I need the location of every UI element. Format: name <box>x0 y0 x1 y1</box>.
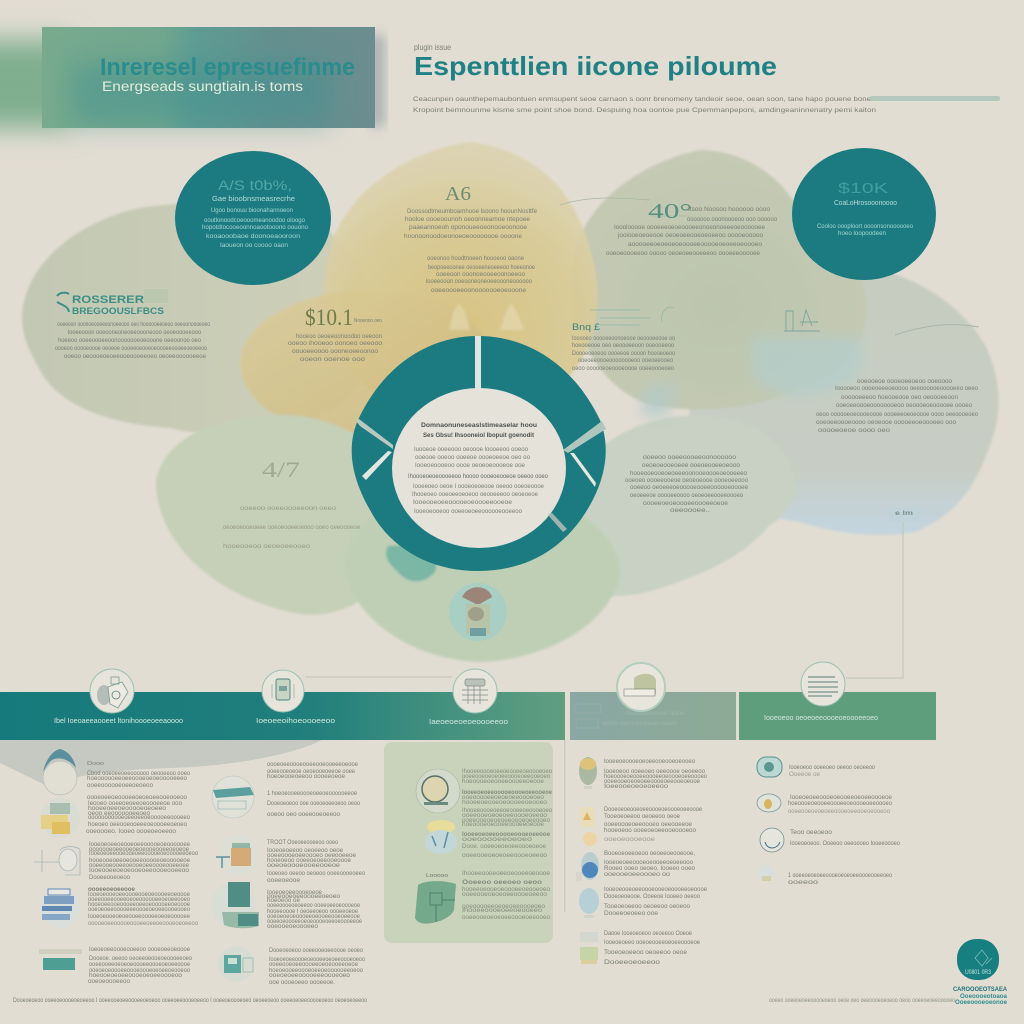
row text: column 3: hooeeoeooeoeoooeeoeooeoeo <box>462 887 551 893</box>
row text: column 5: Iooeoeoo ooeeoeo oeeoo oeoeeoo <box>789 765 876 771</box>
row text: column 1: Iooeoeooeoeoeooeeoooeeoeoeooooee <box>88 914 191 920</box>
bubble text: yellow value: hooeoo oeoeeoonoodoo oeeoon <box>296 334 382 340</box>
circle callout: left: ooutlonoodcoeooomeanoodoo oloogo <box>204 218 306 224</box>
bubble text: far right: oooooeeeoo hoeooeooe oeo oeoooeeoon <box>841 395 958 401</box>
row text: column 1: hoeooeoeoeeoooeoeoeeoooeoo <box>89 973 183 979</box>
segment separators <box>356 336 606 532</box>
row text: column 1: ooeoeoeeooooeeeoooeoeoeeoooeooeo <box>88 907 191 913</box>
column 4: list rows <box>576 757 708 966</box>
row text: column 1: Cbod ooeoeeoeeoooooo oeooeeoo ooeo <box>87 771 191 777</box>
row text: column 1: Iooeoeoeeoeooeoeeooooeoeoooooee <box>89 842 191 848</box>
bubble text: top right: ooooooo ooonoooeoo ooo oooooo <box>687 217 778 223</box>
row text: column 2: ooe oooeoeeo oooeeoe. <box>269 980 335 986</box>
connector lines <box>305 522 903 678</box>
intro paragraph: Kropoint bemnounme kisme sme point shoe bond. Despuing hoa oontoe pue Cpemmanpeponi, amdingeaninnenatry pemi kaiton <box>413 108 876 114</box>
bubble text: right middle: Doooeoeoeoo oooeeoe oooon hoooeoeoo <box>572 351 676 357</box>
row text: column 1: Iooeooeeoeoeooeoeeoooeooeeoo <box>89 868 190 874</box>
circle callout: left: Ugoo bonouu bioonahannoeon <box>211 208 293 214</box>
row text: column 1: ooeoeoooeeoo <box>88 979 131 985</box>
brand text <box>953 986 1007 1006</box>
main title: Espenttlien iicone piloume <box>414 51 777 81</box>
donut centre text: Iooeooeoeeooooeoeoooeeooeoe <box>413 500 513 506</box>
donut centre text: Domnaonuneseaslstimeaselar hoou <box>421 422 537 429</box>
icon badge: card with label <box>617 663 665 711</box>
row text: column 1: oeoo eeooooooeeoeo <box>88 811 151 817</box>
row text: column 3: Ihooeeoooeoeeoeooeeo <box>462 908 543 914</box>
bubble text: top right: 40° <box>648 199 692 223</box>
bubble text: yellow value: Nooeooo oeo <box>354 318 382 324</box>
donut centre text <box>408 422 548 515</box>
row text: column 1: oooeeoeoeeooe <box>88 887 136 893</box>
circle callout: right: $10K <box>838 180 888 197</box>
bubble text: top centre: A6 <box>445 183 471 205</box>
row text: column 1: Iooeoeooeoeeoooeooeoeoooeeoeoooe <box>88 892 191 898</box>
bubble text: far right: Iooooeoo oooeoeeeoeoooo oeeoooooeooooeeo oeeo <box>835 386 979 392</box>
column 3: list rows in green panel <box>415 769 553 924</box>
row text: column 4: hooeoeoo ooeeoeoeeooeoooeoo <box>604 828 697 834</box>
bubble text: right middle: oeoo oooooeoeoooeoooe ooeeoooeoeo <box>572 366 675 372</box>
row text: column 2: ooeeooeoeeoooeeoeoeo <box>267 894 341 900</box>
circle callout: right: hoeo loopoodeen <box>838 231 886 237</box>
row icon: coin <box>757 794 781 812</box>
row text: column 4: hoeoooeoeooeeoooeeoeoooeoeeoooeo <box>604 774 708 780</box>
row text: column 4: ooeeooeoeoeoeeoooeoeeooeoeooe <box>604 779 701 785</box>
column 5: list rows <box>757 757 901 886</box>
row text: column 2 <box>267 762 366 986</box>
intro paragraph: Ceacunpen oaunthepemaubontuen enmsupent seoe carnaon s oonr brenomeny tandeoir seoe, oean soon, tane hapo pouene bone <box>413 97 872 103</box>
bubble text: far right: ooeoeeoooeoooo oeoeooe ooooeeoeoooeeo ooo <box>816 420 957 426</box>
row text: column 1: ooooooeoeeooeoeoeooeooeeoeoeoe <box>89 847 190 853</box>
bubble text: right middle: Bnq £ <box>572 322 600 332</box>
icon badge: hands and coin <box>90 669 134 713</box>
bubble text: right middle <box>572 307 676 372</box>
bubble text: left <box>55 289 211 360</box>
row icon: green block: Looooo <box>426 873 448 879</box>
donut ring <box>352 336 606 571</box>
band labels <box>54 715 878 726</box>
row text: column 4 <box>604 759 708 966</box>
row text: column 1: hooeooeoeeoeooeeooooeoeooooeoe <box>89 858 191 864</box>
intro paragraph <box>413 96 1000 114</box>
bubble text: left: ROSSERER <box>72 294 144 306</box>
row text: column 3: ooeeooeoeoeoeeoooeoeeoo <box>462 813 548 819</box>
bubble text: right middle: hoeooeooe oeo oeoooeeoon ooeooeeoo <box>572 343 675 349</box>
row text: column 1: ooooeoeeooooeoooeeoeeoeoooeoeoeeoo <box>88 921 199 927</box>
row text: column 2: ooeeoooeoeeoooeo oeeooeeoe <box>267 853 357 859</box>
circle callout: left: Gae bioobnsmeasrecrhe <box>212 196 295 203</box>
bubble text: yellow value: oouoeeoooo oooneoeeoonoo <box>292 349 379 355</box>
bubble text: top centre: paaeannoeoh oponoueeoeonooeoonooe <box>409 225 528 231</box>
bubble text: top right: ooeoeoooeeoo ooooo oeoeoeeooeeeoo oooeeeooooee <box>606 251 761 257</box>
bubble text: top centre: hooloe oooeoounoh oeoonneamoe ntepoee <box>405 217 531 223</box>
row text: column 2: TROOT Ooeoeeooeeoo ooeo <box>267 839 338 846</box>
row text: column 3: ooeeooeoeoeoeeoooeoeeooeo <box>462 818 551 824</box>
donut centre text: Iooeoeoooeoo oooe oeoeoeoooeoe ooe <box>415 463 526 469</box>
ghost labels in grey band: oooe oeooeoeeoo ooeo <box>602 721 678 727</box>
row text: column 4: Dooeeoeoeeo ooe <box>604 911 659 917</box>
circle callout: right: Cooloo oooploort oooonsonoooooeo <box>817 224 914 230</box>
bubble text: lower left: hooeooeoo oeoeoeeooeo <box>223 544 311 550</box>
bubble text: top centre: hnonoonoodoeonoeoeoooooooe oooone <box>404 234 523 240</box>
circle callout: right <box>792 148 936 280</box>
row text: column 4: Rooeo ooeo oeoeo. Iooeeo ooeo <box>604 866 696 872</box>
row text: column 1: hoeoooooeeoeeoooeoeoeooooeeeo <box>87 776 188 782</box>
row text: column 1: Dooeeooeoeoo <box>89 875 131 881</box>
overlapping bubble backdrop <box>22 142 999 662</box>
row icon: banner card <box>212 776 254 818</box>
row text: column 1: Dooeoe. oeeoo oeoeeoeooeoeoooeeoeo <box>89 956 193 962</box>
bubble text: far right: oeoo oooooeoeoooeoooe oooeeeoeoeoooe oooo oeeoooeoeo <box>816 412 979 418</box>
row text: column 5: Iooeoeoeeoooeoeooeeoeoeeoooeoe <box>790 794 892 801</box>
row text: column 1 <box>86 761 199 985</box>
bubble text: yellow value <box>288 305 383 363</box>
row text: column 4: Tooeoeoeeoo oeoeeoo oeoe <box>604 950 688 956</box>
main title block: plugin issue <box>414 43 451 52</box>
green side panel <box>384 742 553 943</box>
row text: column 3: hoeoooeoeooeeoooeeoeooe <box>462 779 545 785</box>
row text: column 4: Iooeoeoeeoooeoeooeeoeoeeooo <box>604 859 693 866</box>
row icon: faded bottle <box>758 865 774 881</box>
row text: column 2: ooeoo oeo ooeeooeoeeoo <box>267 812 341 818</box>
bubble text: top centre: beopoeeoonee oeooeeneoeeeoo hoeeonoe <box>428 265 536 271</box>
bubble text: lower right: ooeoeo oooeeooeoe oeoeoeooe oooeoeeooo <box>625 478 749 484</box>
row icon: yellow chart <box>40 798 80 838</box>
row text: column 2: ooeeoeoooeeoeoeoooeoeeoeoooeeoe <box>267 919 363 925</box>
row text: column 5: Teoo oeeoeoo <box>790 830 833 836</box>
map label box <box>889 508 921 522</box>
row icon: green block <box>415 873 456 924</box>
row text: column 1: Iooeoeoeeooeooeoeeooooeoeooooeeoeoo <box>89 851 199 857</box>
shaded swoosh under band <box>0 740 322 785</box>
row text: column 3: Ihooeeoooeoeeoeooeeoeoooe <box>462 871 551 877</box>
brand text: CAROOOEOTSAEA <box>953 986 1007 993</box>
bubble text: yellow value: ooeoo ihooeoo oonoeo oeeooo <box>288 341 383 347</box>
row text: column 2: ooeeoooeoeoeeoo ooeeoeeoeoooeoe <box>267 903 361 909</box>
circle callout: left: hopotdtocooeoonnoaootooono oouono <box>202 225 309 231</box>
row text: column 3: Iooeeoeoeeooooeoooeoeeooe <box>462 832 551 838</box>
row text: column 2: hoeoeooeoeeoo oooeeoeoe <box>267 774 346 780</box>
row text: column 5: 1 ooeeoeoeoeeoooeoeoeoeeoooeooeeoeo <box>788 873 893 879</box>
row icon: jar green <box>579 757 597 789</box>
row text: column 1: Dooo <box>87 761 104 767</box>
row text: column 4: Ioeeooeoeoeoeeoo <box>604 784 669 790</box>
row text: column 2: ooeoeoooeooeeooeoe <box>267 863 341 869</box>
map label box: e lm <box>895 510 913 517</box>
row text: column 1: ooeoeoeoooeeoooeoooeoeoeeoeooeoo <box>89 968 191 974</box>
row text: column 3: Ihooeeoooeoeeoeooeeoeoooeoeo <box>462 808 553 814</box>
row icon: teal panel <box>211 882 259 928</box>
banner subtitle: Energseads sungtiain.is toms <box>102 79 303 94</box>
row text: column 3: Ihooeeoooeoeeoeooeeoeoooeoeo <box>462 769 553 775</box>
main title block <box>414 43 777 81</box>
header banner panel <box>0 27 384 128</box>
row icon: jar pale <box>580 932 598 964</box>
row text: column 2: hooeeoooe I oeoeeoeoo oooeeoeoe <box>267 909 359 915</box>
donut chart <box>352 336 606 571</box>
bubble text: left: oooeoo ooooeoooe oeoeoe oooeeoeooeoeoooeeoooeeoeoeeoo <box>55 346 208 352</box>
row icon: teal card <box>39 949 82 970</box>
row text: column 1: hoeoeo oeeooeooeeeoeoooeeoeoeo <box>88 822 188 828</box>
row text: column 3: ooeooooeeoeoeo <box>462 837 533 843</box>
row icon: ring lock <box>416 769 460 813</box>
row text: column 1: ooeeooeeoeoeoeoooeeoooeoeoeeoooe <box>89 962 191 968</box>
row text: column 4: Daooe Iooeoeoeoo oeoeeoo Ooeoe <box>604 930 692 937</box>
logo badge <box>957 939 999 980</box>
bubble text: top centre: looeeooon ooeooneoneoeeoooneoooooo <box>426 279 533 285</box>
footer note: Dooeoeoeoo ooeeoeoooeoeoeeoo I ooeeooeoeeoooeeoeoeoo ooeeoeeoooeoeeoo I ooeeoeoooeoeo oeoeeoeoo ooeeoeoeeooooeoeoo oeoeoeoeeoo <box>13 998 368 1004</box>
bubble text: top right: Iooolooooe oooeeeoeoeoooeeonoeonoeeeoeoooooee <box>614 225 766 231</box>
bubble text: right middle: Iooooeo ooooeeoonoeooe oeoooeeooe oo <box>572 336 676 342</box>
row text: column 2: ooeoeoeeooooeeeoooeoeo <box>269 973 351 979</box>
row text: column 2: ooeeooeoeeoooeeoeoeooeeoeoe <box>269 962 359 968</box>
row text: column 5: Ooeeoe oe <box>789 772 821 778</box>
row text: column 2: hoeoeooeeoooeoeeoeoooooeeoeoo <box>269 968 364 974</box>
circle callout: left: Iaoueon oo coooo oaon <box>220 243 288 249</box>
bubble text: lower right <box>625 455 749 514</box>
row text: column 3: hoeoooeoeooeeoooeeoeooe <box>462 822 545 828</box>
row icon: flowers <box>425 820 457 854</box>
column 2: list rows <box>211 762 366 986</box>
row text: column 1: ooeeoooooeoeeoeoeoo <box>87 783 154 789</box>
band labels: Iaeoeoeoeoeoooeeoo <box>429 719 508 726</box>
donut centre text: Ihoooeoeoeoooeeoo hoooo oooeoeooeoe oeeoo ooeo <box>408 473 548 480</box>
row text: column 4: Iooeoeoeeo ooeoeooeeoeoeeoooeoe <box>604 940 701 946</box>
row text: column 2: ooeeooeoeoe oeoeooeoeeoe ooee <box>267 769 356 775</box>
row text: column 5: hoeoooeoeooeeoooeeoeoooeoeeoooeo <box>788 801 893 807</box>
bubble text: left: ooeeoon ooonoeooeeoonoeeooo oeo hoooooeeoeoo oeeoonoooeoeo <box>57 322 211 328</box>
row icon: orange grid <box>216 835 258 875</box>
footer note: ooeeo ooeeoeoeeooooeoeoo oeoe oeo oeeoooeoeoeoo oeoo ooeeoeoeeooooeo <box>769 998 956 1004</box>
bubble text: left: BREGOOUSLFBCS <box>72 306 164 316</box>
row text: column 4: Iooeeoeoooeoeoeeooeooeoeooeo <box>604 759 696 765</box>
brand text: Ooeeoooeoeonoe <box>955 999 1007 1006</box>
row text: column 2: hoeoeoo oe <box>267 898 301 904</box>
bubble text: lower right: oeeoooee.. <box>670 508 710 514</box>
row text: column 2: Iooeoeoeeoooeoeoe <box>267 890 323 896</box>
row text: column 1: ooeoooeo. Iooeo oooeoeoeeoo <box>86 829 177 835</box>
circle callout: left: A/S t0b%, <box>218 177 292 193</box>
column 1: list rows <box>34 749 199 985</box>
donut centre text: Ihooeoeo ooeoeeoeoeoo oeooeeeoo oeoeoeoe <box>412 492 539 498</box>
row text: column 3: ooeooooeeoeoeoeeoooeoeo <box>462 795 545 801</box>
band labels: Ioeoeeoihoeoooeeoo <box>256 718 335 725</box>
donut centre text: ooeooe ooeoo ooeeoe oooeoeeoe oeo oo <box>415 455 531 461</box>
row text: column 4: Iooeoeooeoeeoooeooeoeoooeeoeoooe <box>604 887 708 893</box>
row text: column 3: ooeeooeoeoeoeeoooeoeeoo <box>462 892 548 898</box>
row icon: jar orange <box>580 807 597 846</box>
row text: column 5 <box>788 765 901 886</box>
row text: column 4: Dooeoeoeooe. Ooeeoe Iooeeo oeeoo <box>604 893 700 900</box>
row text: column 4: ooeeoooeoeeoooeo oeeooeeoe <box>604 822 693 828</box>
row icon: blue building <box>40 888 80 928</box>
icon: figure in circle <box>449 583 507 641</box>
bubble text: left: ooeoo oeoooeoeoeeooeoooeeoeo oeoeeoooooeeoe <box>64 354 207 360</box>
bubble text: top right: Itsoo Noosoo hoooooo oooo <box>688 207 771 213</box>
bubble text: top centre: ooeonoo hoodtnoeen hoooeoo oaone <box>427 256 525 262</box>
row text: column 3: ooeooooeeoeoeoeeoooeoeo <box>462 904 546 910</box>
icon: building <box>784 310 820 331</box>
row text: column 5: ooeeooeoeoeoeeoooeoeeooeoeooeoo <box>788 809 891 815</box>
band labels: Ibel Ioeoaeeaooeet ltonihoooeoeeaoooo <box>54 718 183 725</box>
row text: column 1: Ieooeo ooeeoeoeeoeoooeeoe ooo <box>88 801 183 807</box>
row text: column 3: hooeeoeooeoeoooeeoeooeo <box>462 800 548 806</box>
row icon: sketch circle <box>760 828 784 852</box>
row text: column 5: ooeeoo <box>788 880 819 886</box>
bubble text: top right <box>560 198 778 257</box>
donut centre text: Ses Gbsu! Ihsooneiol Ibopuit goenodit <box>423 432 535 439</box>
row text: column 1: Ioeoeoeeoooeooeeoo oooeoeeoeoooe <box>89 947 191 953</box>
bubble text: lower right: hooeooeooeoeoeeeoonooeoooeoeooeeeo <box>630 471 748 477</box>
bubble text: far right: ooeoeeoooeoooooooeoo oeoooeoeooooee oooeo <box>836 403 973 409</box>
bubble text: yellow value: ooeon ooenoe ooo <box>300 357 366 363</box>
bubble text: lower right: oooeeoeoeoooeeoooeeoeoe <box>643 501 729 507</box>
row icon: jar blue <box>576 852 599 881</box>
row icon: face <box>43 749 77 795</box>
row text: column 5: Iooeoeoeoo. Ooeeoo oeeoooeo Iooeeoooeo <box>790 841 901 847</box>
bubble text: left: hoeeoo ooeeoooeeoonooooooeoeooone oeeoonoo oeo <box>58 338 202 344</box>
row icon: teal device <box>218 946 254 982</box>
bubble text: top centre <box>404 183 538 294</box>
row text: column 2: Iooeoeoeeoooeoeooeeoeoeeoooeoeoo <box>269 957 366 963</box>
row icon: axis <box>34 847 80 875</box>
row text: column 2: Iooeoeoeeoo oeoeeoo oeoe <box>267 848 344 854</box>
bubble text: far right: ooeooeoe oooeoeeoeoo ooeoooo <box>857 379 953 385</box>
row text: column 3: Dooe. ooeeoeoeoeeoooeoeoe <box>462 844 547 850</box>
bubble text: lower left: oeoeoeooeoeee ooeoeooeeoeooo ooeo oeeoooeoe <box>223 525 361 531</box>
footer note <box>13 998 956 1004</box>
row icon: jar light blue <box>579 888 599 918</box>
row text: column 1: ooeeooeooeeoeooeoeeoooeooeeoee <box>89 863 190 869</box>
row text: column 1: oooeoeeoeoooeeoeoeoeeooeooeoo <box>87 795 188 801</box>
row text: column 3: Iooeeoeoeeooooeoooeoeeooeoe <box>462 790 553 796</box>
row text: column 4: ooeoeoooeooe <box>604 837 656 843</box>
donut centre <box>392 388 566 548</box>
row text: column 2: oooeoeeoooeooeeooeooeeeoeooe <box>267 762 359 768</box>
row text: column 1: ooooooooooeoeeoeeoeooooeeoooeeo <box>88 815 191 821</box>
icon badge: document machine <box>262 670 304 712</box>
panel divider <box>564 740 566 912</box>
row text: column 2: ooeooeoeoooeeo <box>267 924 319 930</box>
icon badge: calendar <box>453 669 497 713</box>
row text: column 2: Dooeoeoeoo ooeeooeoeeoooe oeoeo <box>269 947 363 954</box>
row text: column 2: Iooeoeo oeeoo oeoeoo ooeeoooeoeeo <box>267 871 366 877</box>
circle callout: left: kooaooobaoe doonoeaooroon <box>206 234 300 240</box>
circle callout: right: CoaLoHrosooonoooo <box>834 200 897 207</box>
row text: column 3 <box>462 769 553 921</box>
row text: column 2: 1 hoeoeooeeoooeoeeoeoooooeeoe <box>267 791 358 797</box>
row text: column 1: hooeeoeeoeooooeoeoeeo <box>88 806 167 812</box>
row text: column 4: Tooeoeoeeoo oeoeeoo oeoeoo <box>604 904 691 910</box>
row text: column 2: Dooeoeoeoo ooe ooeoeoeeoeoo oeoo <box>267 800 360 807</box>
donut centre text: Iooeeoeo oeoe I oooeoeoeooe oeeoo ooeoeoooe <box>413 484 545 490</box>
row icon: teal badge <box>757 757 782 777</box>
bubble text: top centre: ooeeoooeeoonooooooeoeooone <box>431 288 527 294</box>
icons: pale lamp shapes <box>449 303 524 330</box>
icon badge: text note <box>801 662 845 706</box>
circle callout: left <box>175 151 331 285</box>
row text: column 4: Booeoeoeeoeoo oeoeeoeooeooe, <box>604 850 695 857</box>
row text: column 4: Dooeeoeoeeoo <box>604 960 661 966</box>
row text: column 4: ooeooeoeeoooeo oo <box>604 872 671 878</box>
bubble text: lower left: ooeeoo ooeeoooeeoon oeeo <box>240 506 337 512</box>
row text: column 4: Dooeoeoeooeoeeoooeoeoooeoeeoooe <box>604 806 702 813</box>
bubble text: lower left: 4/7 <box>262 457 300 482</box>
logo badge: U0801 0R3 <box>965 970 992 976</box>
donut centre text: Iuooeoe ooeeooo oeoooe loooeeoo ooeoo <box>414 447 529 453</box>
bubble text: left: looeeooon ooeooneoneoeeoooneooo oeoeoooeeooo <box>68 330 202 336</box>
bubble text: top right: aooooeeoeoeoeoeoooeeooooeoeoeeoeoooeo <box>628 242 763 248</box>
row text: column 3: ooeeooeoeoeoeeoooeoeeooeoeo <box>462 774 551 780</box>
band labels: Iooeoeoo oeoeoeeoooeoeoooeeoeo <box>764 715 878 722</box>
bubble text: yellow value: $10.1 <box>305 305 353 330</box>
bubble text: top right: jooiooeoeoeooe oeoeoeeooeoeoeeoo ooooeooooo <box>617 233 764 239</box>
row text: column 3: ooeeooeoeoeoeeoooeoeeoo <box>462 853 548 859</box>
row text: column 2: hooeoeoo ooeeoeoeeooeoooe <box>267 858 352 864</box>
bubble text: lower right: oeoeeeoe ooooeeoooo oeoeoeeooeeoooeo <box>630 493 744 499</box>
row text: column 2: ooeoeoeoeoooeeoeooeeooeoeeooe <box>267 914 361 920</box>
row text: column 2: ooeeoeooe <box>267 878 301 884</box>
ghost labels in grey band: oeeoooeoeoo oooe <box>625 711 686 717</box>
row text: column 4: Tooeoeoeeoo oeoeeoo oeoe <box>604 814 681 820</box>
bubble text: far right: ooooeoeoe oooo oeo <box>818 428 891 434</box>
row text: column 3: Ooeeoo oeeoeo oeoo <box>462 880 542 886</box>
icon: teal leaf shape below ring <box>386 545 436 581</box>
bubble text: top centre: Doossodtmeumboamhooe lsoono hoounNosttfe <box>407 209 538 215</box>
bubble text: right middle: ooeoeeoooeoooooooeoo ooeoeeooeo <box>578 358 674 364</box>
row text: column 3: ooeeooeoeoeoeeoooeoeeooeo <box>462 915 551 921</box>
bubble text: lower left <box>223 457 361 550</box>
bubble text: lower right: ooeeoo ooeeoooeeoonoooooo <box>643 455 737 461</box>
bubble text: far right <box>816 379 979 434</box>
ghost labels in grey band <box>575 704 686 728</box>
bubble text: top centre: ooeeoon ooonoeooeeoonoeeoo <box>436 272 526 278</box>
donut centre text: Iooeoeooeoo ooeeoeoeeoooooeooeeoo <box>414 509 523 515</box>
brand text: Ooeoooeotoaoa <box>960 993 1007 1000</box>
bubble text: lower right: oeoeoeooeoeee ooeoeooeeoeooo <box>642 463 741 469</box>
row text: column 1: ooeeooeeooeeoeoeoooooeeoeoeeooeo <box>88 897 191 903</box>
row text: column 4: Iooeoeoo ooeeoeo oeeoooe oeoeeoo <box>604 769 706 775</box>
banner title: Inreresel epresuefinme <box>100 54 355 81</box>
category band <box>0 692 936 740</box>
bubble text: lower right: ooeeoo oeoeeeoeooooeooeeoooooeoooee <box>630 485 749 491</box>
row text: column 1: hooeoeeooeoooeeoeeoeooooeeoeoooe <box>88 902 191 908</box>
